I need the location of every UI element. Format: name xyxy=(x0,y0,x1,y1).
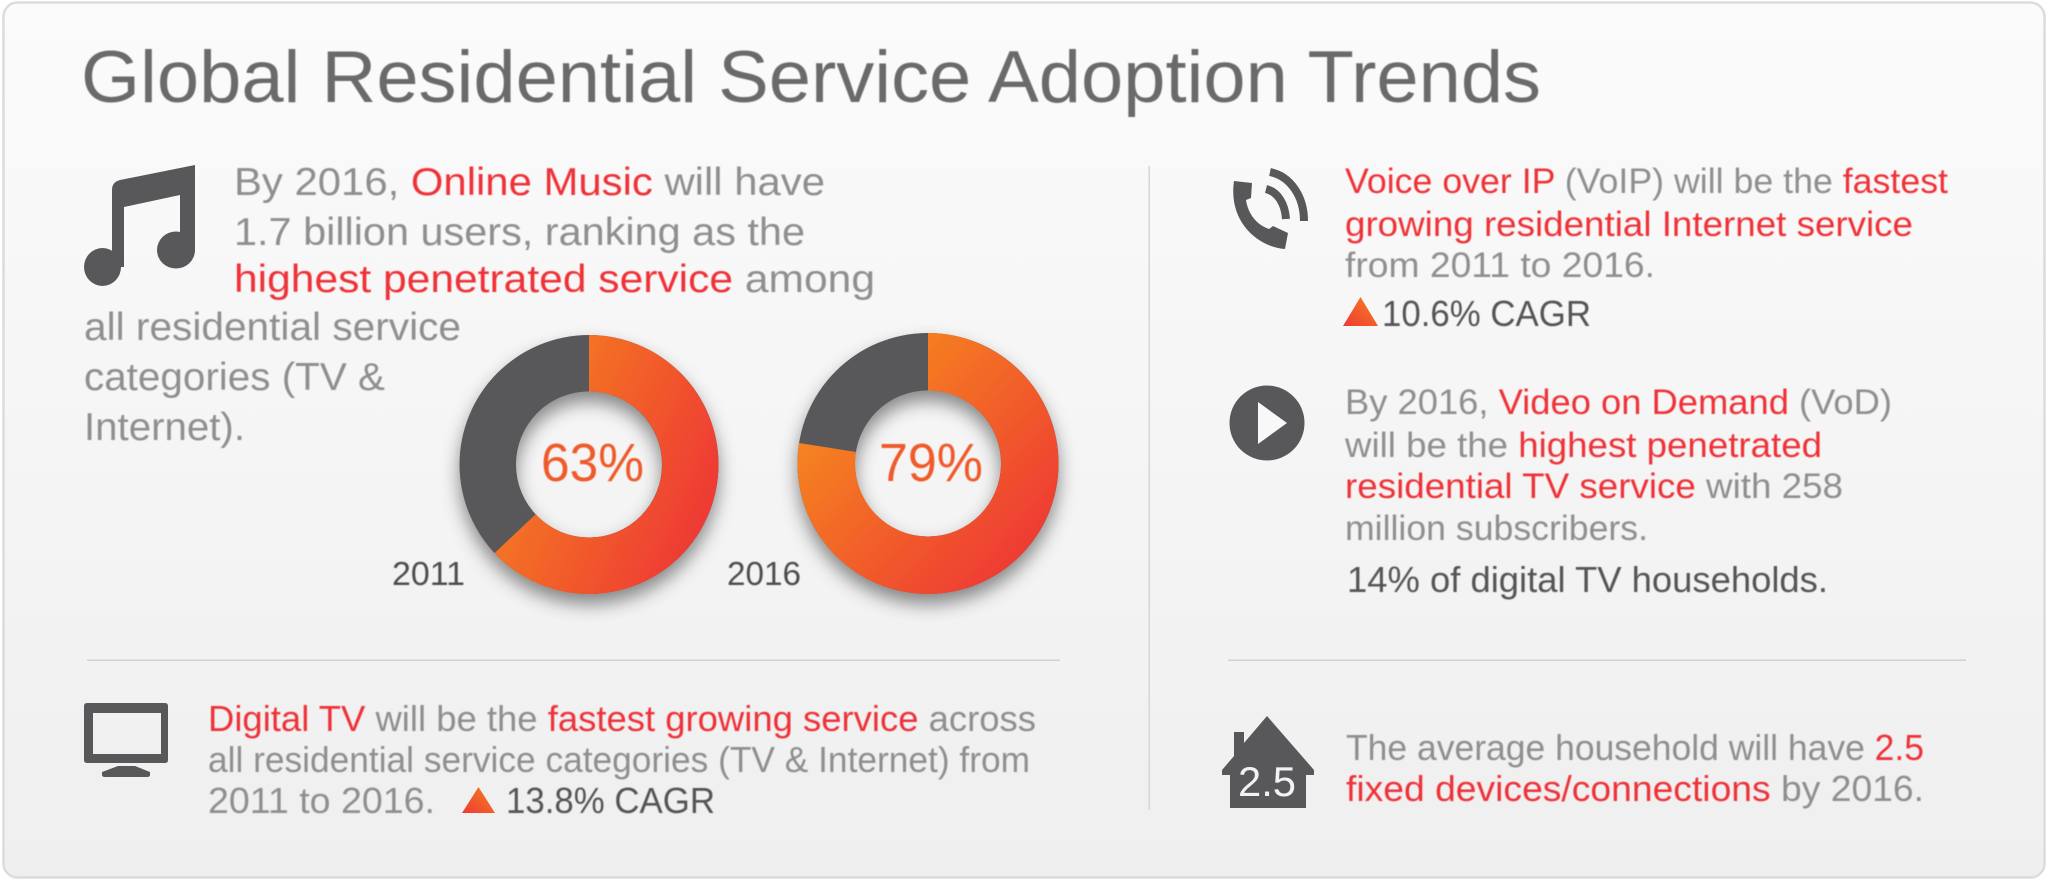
panel: household devices xyxy=(1222,716,1924,809)
text: VoIP statement xyxy=(1345,162,1948,285)
icon: house with 2.5: 2.5 xyxy=(1238,758,1296,805)
text: online music statement: highest penetrated service among xyxy=(234,258,875,301)
panel: video on demand xyxy=(1230,383,1892,600)
text: 14% of digital TV households: 14% of digital TV households. xyxy=(1347,559,1828,600)
panel: digital TV xyxy=(84,698,1036,821)
text: VoD statement: By 2016, Video on Demand (VoD) xyxy=(1345,383,1892,422)
text: digital TV statement: Digital TV will be the fastest growing service across xyxy=(208,698,1036,739)
value: 10.6% CAGR: 10.6% CAGR xyxy=(1382,293,1591,334)
text: VoIP statement: from 2011 to 2016. xyxy=(1345,246,1655,285)
icon: up triangle xyxy=(1343,297,1378,326)
label: 2011: 2011 xyxy=(392,555,465,592)
icon: play button xyxy=(1230,386,1304,460)
text: online music statement: Internet). xyxy=(84,406,245,449)
text: online music statement xyxy=(84,161,875,449)
value: 79%: 79% xyxy=(879,433,983,493)
icon: up triangle xyxy=(462,787,495,813)
icon: phone with signal arcs xyxy=(1233,172,1304,249)
icon: television xyxy=(84,703,168,777)
text: online music statement: all residential service xyxy=(84,306,461,349)
value: 13.8% CAGR: 13.8% CAGR xyxy=(506,780,715,821)
text: online music statement: By 2016, Online Music will have xyxy=(234,161,825,204)
text: household statement: fixed devices/connections by 2016. xyxy=(1346,768,1924,809)
text: online music statement: categories (TV & xyxy=(84,356,385,399)
text: VoD statement: will be the highest penetrated xyxy=(1344,426,1822,465)
text: household statement: The average household will have 2.5 xyxy=(1346,727,1924,768)
text: online music statement: 1.7 billion users, ranking as the xyxy=(234,211,805,254)
text: VoD statement xyxy=(1344,383,1892,548)
text: digital TV statement xyxy=(208,698,1036,821)
text: digital TV statement: all residential service categories (TV & Internet) from xyxy=(208,739,1030,780)
panel: voice over IP xyxy=(1233,162,1948,334)
panel: online music xyxy=(84,161,1059,594)
value: 63%: 63% xyxy=(541,433,644,493)
text: digital TV statement: 2011 to 2016. xyxy=(208,780,435,821)
chart: 2016 donut 79% xyxy=(727,333,1059,594)
text: VoIP statement: growing residential Internet service xyxy=(1345,205,1913,244)
chart: 2011 donut 63% xyxy=(392,335,718,594)
text: household statement xyxy=(1346,727,1924,809)
icon: house with 2.5 xyxy=(1222,716,1314,808)
title: Global Residential Service Adoption Trends xyxy=(81,37,1541,118)
text: VoD statement: residential TV service with 258 xyxy=(1345,467,1843,506)
text: VoIP statement: Voice over IP (VoIP) will be the fastest xyxy=(1345,162,1948,201)
icon: music note xyxy=(84,165,195,286)
text: VoD statement: million subscribers. xyxy=(1345,509,1648,548)
label: 2016: 2016 xyxy=(727,555,801,592)
